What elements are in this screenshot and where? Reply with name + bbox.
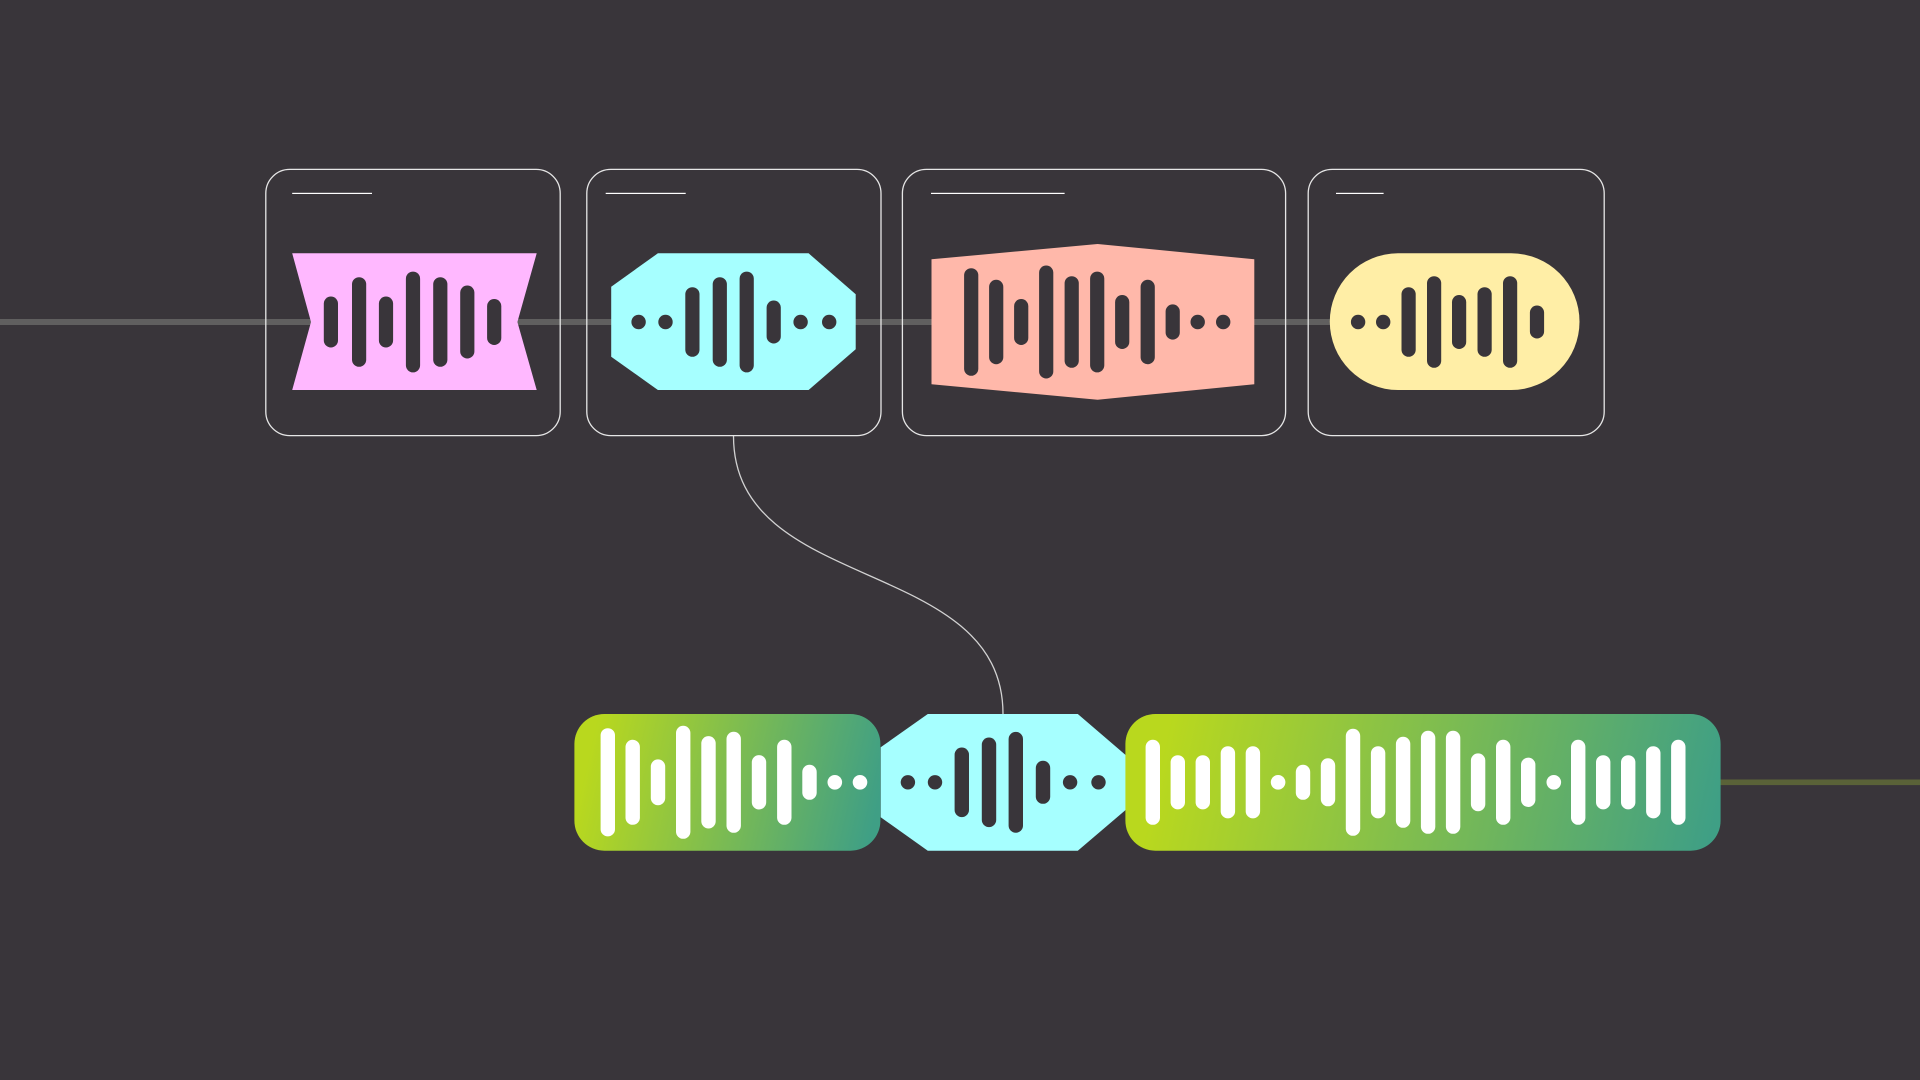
- card 4: [1308, 169, 1604, 436]
- connector curve: [734, 436, 1003, 714]
- pink waveform shape: [292, 253, 537, 390]
- card 3: [902, 169, 1286, 436]
- card 1: [266, 169, 560, 436]
- card 3 label line: [931, 193, 1065, 194]
- card 2: [587, 169, 881, 436]
- salmon waveform shape: [932, 244, 1254, 400]
- card 4 label line: [1336, 193, 1384, 194]
- yellow waveform shape: [1330, 253, 1580, 390]
- top timeline line: [0, 319, 1340, 325]
- cyan waveform shape: [611, 253, 856, 390]
- cyan waveform clip middle: [881, 714, 1126, 851]
- green waveform clip left: [574, 714, 880, 851]
- bottom right timeline line: [1715, 780, 1920, 785]
- card 1 label line: [292, 193, 372, 194]
- green waveform clip right: [1125, 714, 1721, 851]
- card 2 label line: [606, 193, 686, 194]
